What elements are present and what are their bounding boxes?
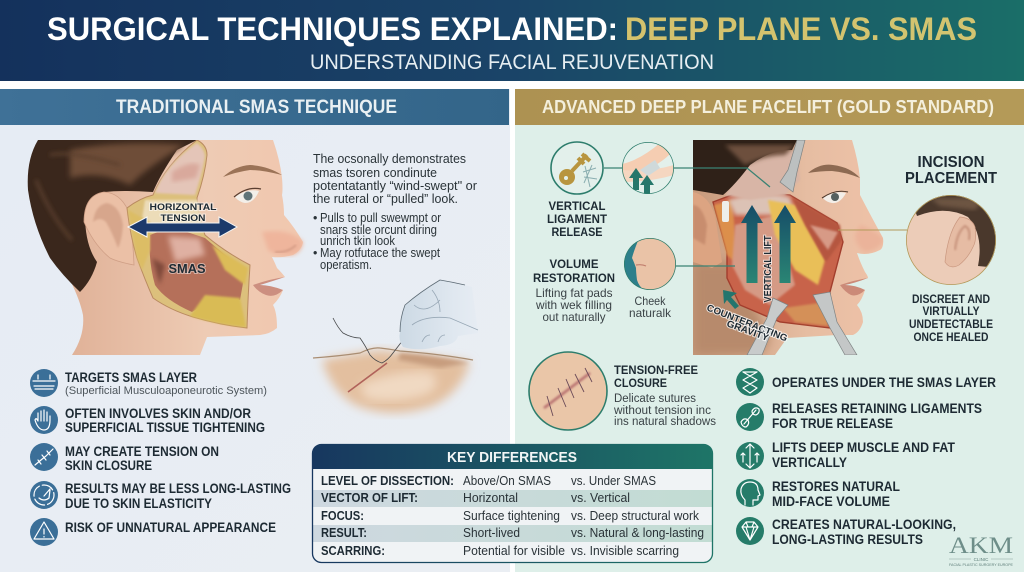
row: scarring: Potential for visible <box>463 544 565 558</box>
item: releases ligaments: RELEASES RETAINING LIGAMENTS <box>772 401 982 416</box>
panel: traditional SMAS technique <box>0 89 510 572</box>
text block: technique description: operatism. <box>320 258 372 272</box>
label: horizontal tension: TENSION <box>160 213 206 224</box>
item: operates under SMAS <box>736 368 996 396</box>
logo: AKM clinic: CLINIC <box>974 557 989 562</box>
title: DEEP PLANE VS. SMAS <box>625 11 977 47</box>
row: scarring: vs. Invisible scarring <box>571 544 679 558</box>
row: result: vs. Natural & long-lasting <box>571 526 704 540</box>
connector lines <box>604 168 770 266</box>
illustration: gloved hand suturing skin <box>313 280 478 413</box>
text block: technique description: Pulls to pull swewmpt or <box>320 211 441 225</box>
row: focus: Surface tightening <box>463 509 560 523</box>
feature list: traditional SMAS <box>30 369 291 546</box>
row: scarring: SCARRING: <box>321 544 385 558</box>
heading: deep plane: ADVANCED DEEP PLANE FACELIFT (GOLD STANDARD) <box>542 97 994 117</box>
item: skin tightening: SUPERFICIAL TISSUE TIGHTENING <box>65 420 265 435</box>
callout: tension-free closure: CLOSURE <box>614 376 667 390</box>
label: vertical lift: VERTICAL LIFT <box>763 236 774 302</box>
callout: incision placement <box>905 154 1000 344</box>
row: scarring <box>321 544 679 558</box>
row: vector of lift: vs. Vertical <box>571 491 630 505</box>
callout: vertical ligament release: RELEASE <box>552 225 602 239</box>
item: less long-lasting <box>30 481 291 511</box>
callout: incision placement: UNDETECTABLE <box>909 319 993 331</box>
callout: volume restoration: naturalk <box>629 306 672 320</box>
label: horizontal tension <box>128 202 237 237</box>
label: SMAS: SMAS <box>168 261 206 276</box>
text block: technique description: The ocsonally demonstrates <box>313 152 466 166</box>
row: vector of lift <box>321 491 630 505</box>
logo: AKM clinic: FACIAL PLASTIC SURGERY EUROPE <box>949 563 1014 567</box>
callout: incision placement: INCISION <box>918 154 984 171</box>
callout: tension-free closure: Delicate sutures <box>614 393 696 405</box>
item: tension on closure: SKIN CLOSURE <box>65 458 152 473</box>
row: result: RESULT: <box>321 526 367 540</box>
icon: ligament release <box>622 142 674 197</box>
callout: incision placement: PLACEMENT <box>905 170 997 187</box>
item: lifts vertically: LIFTS DEEP MUSCLE AND FAT <box>772 440 956 455</box>
item: targets SMAS layer: TARGETS SMAS LAYER <box>65 370 197 385</box>
dissected tissue <box>713 190 843 328</box>
callout: vertical ligament release: VERTICAL <box>548 199 606 213</box>
callout: volume restoration: Cheek <box>634 294 666 308</box>
item: mid-face volume: MID-FACE VOLUME <box>772 494 890 509</box>
row: focus <box>321 509 700 523</box>
illustration: face with SMAS layer exposed <box>28 140 303 355</box>
arrow: horizontal tension <box>128 217 237 237</box>
icon: key <box>551 142 603 194</box>
row: focus: FOCUS: <box>321 509 364 523</box>
text block: technique description: potentatantly “wind-swept" or <box>313 179 477 193</box>
item: less long-lasting: RESULTS MAY BE LESS LONG-LASTING <box>65 481 291 496</box>
callout: incision placement: ONCE HEALED <box>914 332 988 344</box>
item: operates under SMAS: OPERATES UNDER THE SMAS LAYER <box>772 375 996 390</box>
callout: vertical ligament release <box>547 142 674 239</box>
text block: technique description: unrich tkin look <box>320 234 396 248</box>
row: result <box>321 526 704 540</box>
item: natural results: LONG-LASTING RESULTS <box>772 532 923 547</box>
callout: volume restoration: with wek filling <box>535 298 612 312</box>
callout: tension-free closure <box>529 352 716 430</box>
item: releases ligaments: FOR TRUE RELEASE <box>772 416 893 431</box>
item: lifts vertically: VERTICALLY <box>772 455 847 470</box>
hair and temple <box>725 150 800 200</box>
ear and neck <box>693 192 722 268</box>
text block: technique description: the ruteral or “pulled” look. <box>313 192 458 206</box>
callout: volume restoration: out naturally <box>542 310 606 324</box>
brow, eye, lips <box>223 165 282 177</box>
text block: technique description: snars stile orcunt diring <box>320 223 437 237</box>
ear <box>84 192 134 265</box>
exposed tissue <box>127 140 250 328</box>
arrows: vertical lift <box>741 205 796 283</box>
row: vector of lift: Horizontal <box>463 491 518 505</box>
text block: technique description: • <box>313 211 317 225</box>
subtitle: UNDERSTANDING FACIAL REJUVENATION <box>310 51 714 74</box>
callout: tension-free closure: without tension inc <box>613 405 711 417</box>
panel: advanced deep plane facelift <box>515 89 1024 572</box>
callout: incision placement: VIRTUALLY <box>922 306 980 318</box>
item: unnatural appearance: RISK OF UNNATURAL APPEARANCE <box>65 520 276 535</box>
row: result: Short-lived <box>463 526 520 540</box>
row: level of dissection <box>321 474 656 488</box>
label: horizontal tension: HORIZONTAL <box>150 202 217 213</box>
item: mid-face volume <box>736 479 900 509</box>
logo: AKM clinic: AKM <box>949 533 1013 558</box>
title: SURGICAL TECHNIQUES EXPLAINED: <box>47 11 618 47</box>
row: level of dissection: Above/On SMAS <box>463 474 551 488</box>
item: targets SMAS layer: (Superficial Musculoaponeurotic System) <box>65 385 267 397</box>
item: tension on closure: MAY CREATE TENSION ON <box>65 444 219 459</box>
item: skin tightening: OFTEN INVOLVES SKIN AND/OR <box>65 406 251 421</box>
retractors <box>780 140 805 192</box>
table title: KEY DIFFERENCES <box>447 449 577 466</box>
text block: technique description: • <box>313 246 317 260</box>
icon: sutured skin <box>529 352 607 430</box>
text block: technique description: smas tsoren condinute <box>313 166 437 180</box>
item: natural results <box>736 517 956 547</box>
callout: volume restoration <box>533 236 680 324</box>
text block: technique description: May rotfutace the swept <box>320 246 440 260</box>
brow, eye, lips <box>808 165 860 178</box>
row: vector of lift: VECTOR OF LIFT: <box>321 491 418 505</box>
item: targets SMAS layer <box>30 369 267 397</box>
callout: tension-free closure: TENSION-FREE <box>614 363 698 377</box>
arrow: counteracting gravity <box>723 290 739 309</box>
heading: traditional SMAS: TRADITIONAL SMAS TECHNIQUE <box>116 97 397 118</box>
icon: ear close-up <box>906 190 1000 285</box>
illustration: deep plane dissection face <box>693 140 884 355</box>
page header banner <box>0 0 1024 81</box>
table: key differences <box>312 444 713 563</box>
row: focus: vs. Deep structural work <box>571 509 700 523</box>
callout: incision placement: DISCREET AND <box>912 294 990 306</box>
icon: cheek portrait <box>624 238 676 290</box>
item: tension on closure <box>30 443 219 473</box>
illustration: deep plane dissection face: GRAVITY <box>725 318 771 344</box>
text block: technique description <box>313 152 477 272</box>
callout: volume restoration: Lifting fat pads <box>536 286 612 300</box>
item: skin tightening <box>30 406 265 435</box>
callout: tension-free closure: ins natural shadows <box>614 416 716 428</box>
callout: vertical ligament release: LIGAMENT <box>547 212 608 226</box>
item: releases ligaments <box>736 401 982 431</box>
item: natural results: CREATES NATURAL-LOOKING, <box>772 517 956 532</box>
item: less long-lasting: DUE TO SKIN ELASTICITY <box>65 496 212 511</box>
item: mid-face volume: RESTORES NATURAL <box>772 479 900 494</box>
logo: AKM clinic <box>949 533 1014 567</box>
label: counteracting gravity: COUNTERACTING <box>705 303 789 344</box>
item: lifts vertically <box>736 440 956 470</box>
callout: volume restoration: RESTORATION <box>533 271 615 285</box>
item: unnatural appearance <box>30 518 276 546</box>
row: level of dissection: LEVEL OF DISSECTION: <box>321 474 454 488</box>
row: level of dissection: vs. Under SMAS <box>571 474 656 488</box>
feature list: deep plane <box>736 368 996 547</box>
callout: volume restoration: VOLUME <box>550 257 598 271</box>
